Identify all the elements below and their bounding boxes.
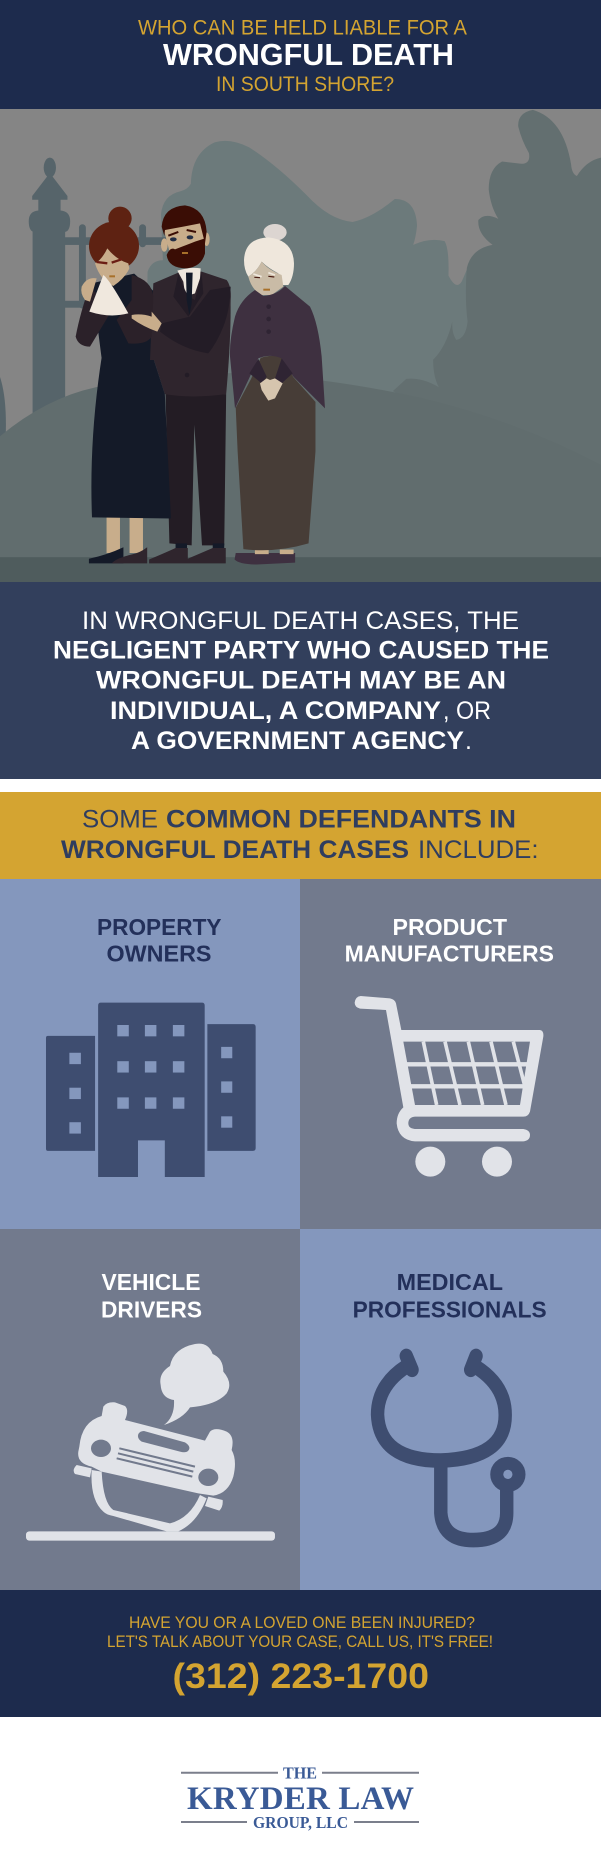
logo: The Kryder Law Group, LLC: GROUP, LLC bbox=[253, 1813, 348, 1832]
call to action panel: HAVE YOU OR A LOVED ONE BEEN INJURED? bbox=[129, 1613, 475, 1632]
illustration: mourning family at cemetery bbox=[0, 109, 601, 582]
elderly woman upper body bbox=[230, 224, 325, 408]
call to action panel bbox=[0, 1590, 601, 1717]
icon: shopping cart bbox=[355, 996, 543, 1177]
section heading band: WRONGFUL DEATH CASES bbox=[61, 836, 409, 864]
panel: property owners: OWNERS bbox=[106, 940, 212, 966]
elderly woman skirt and shoes bbox=[235, 356, 315, 564]
icon: overturned car bbox=[26, 1344, 275, 1541]
woman lower body bbox=[89, 274, 171, 563]
statement panel: . bbox=[465, 727, 472, 755]
icon: office buildings bbox=[46, 1003, 256, 1177]
statement panel: NEGLIGENT PARTY WHO CAUSED THE bbox=[53, 636, 549, 664]
icon: stethoscope bbox=[378, 1356, 526, 1540]
statement panel: IN WRONGFUL DEATH CASES, THE bbox=[82, 607, 519, 635]
section heading band: SOME bbox=[82, 806, 158, 834]
ground bbox=[0, 557, 601, 582]
statement panel: WRONGFUL DEATH MAY BE AN bbox=[96, 666, 506, 694]
panel: product manufacturers: PRODUCT bbox=[392, 914, 507, 940]
hill bbox=[0, 373, 601, 559]
statement panel bbox=[0, 582, 601, 779]
logo: The Kryder Law Group, LLC: THE bbox=[283, 1764, 317, 1782]
title: IN SOUTH SHORE? bbox=[216, 73, 394, 96]
title: WHO CAN BE HELD LIABLE FOR A bbox=[138, 16, 467, 40]
panel: medical professionals: PROFESSIONALS bbox=[353, 1296, 547, 1322]
panel: medical professionals bbox=[300, 1229, 601, 1590]
panel: medical professionals: MEDICAL bbox=[397, 1269, 503, 1295]
logo: The Kryder Law Group, LLC bbox=[181, 1764, 419, 1832]
background tree bbox=[146, 141, 498, 421]
section heading band: INCLUDE: bbox=[418, 836, 538, 864]
man upper body bbox=[150, 205, 231, 360]
call to action panel: LET'S TALK ABOUT YOUR CASE, CALL US, IT'S FREE! bbox=[107, 1632, 493, 1651]
statement panel: INDIVIDUAL, A COMPANY bbox=[110, 697, 441, 725]
panel: vehicle drivers bbox=[0, 1229, 300, 1590]
panel: property owners bbox=[0, 879, 300, 1229]
panel: vehicle drivers: DRIVERS bbox=[101, 1296, 202, 1322]
panel: vehicle drivers: VEHICLE bbox=[102, 1269, 200, 1295]
panel: product manufacturers: MANUFACTURERS bbox=[345, 940, 554, 966]
woman upper body with tissue bbox=[76, 207, 162, 347]
statement panel: , OR bbox=[443, 697, 491, 725]
section heading band: COMMON DEFENDANTS IN bbox=[166, 806, 516, 834]
phone number: (312) 223-1700 bbox=[172, 1657, 429, 1696]
header panel bbox=[0, 0, 601, 109]
section heading band bbox=[0, 792, 601, 879]
title: WRONGFUL DEATH bbox=[163, 37, 454, 72]
statement panel: A GOVERNMENT AGENCY bbox=[131, 727, 464, 755]
man lower body bbox=[149, 285, 231, 563]
small bush far left bbox=[0, 377, 6, 440]
right tree bbox=[393, 110, 601, 498]
iron fence and gatepost bbox=[29, 158, 166, 417]
title bbox=[138, 16, 467, 96]
panel: property owners: PROPERTY bbox=[97, 914, 222, 940]
logo: The Kryder Law Group, LLC: KRYDER LAW bbox=[187, 1781, 414, 1817]
panel: product manufacturers bbox=[300, 879, 601, 1229]
